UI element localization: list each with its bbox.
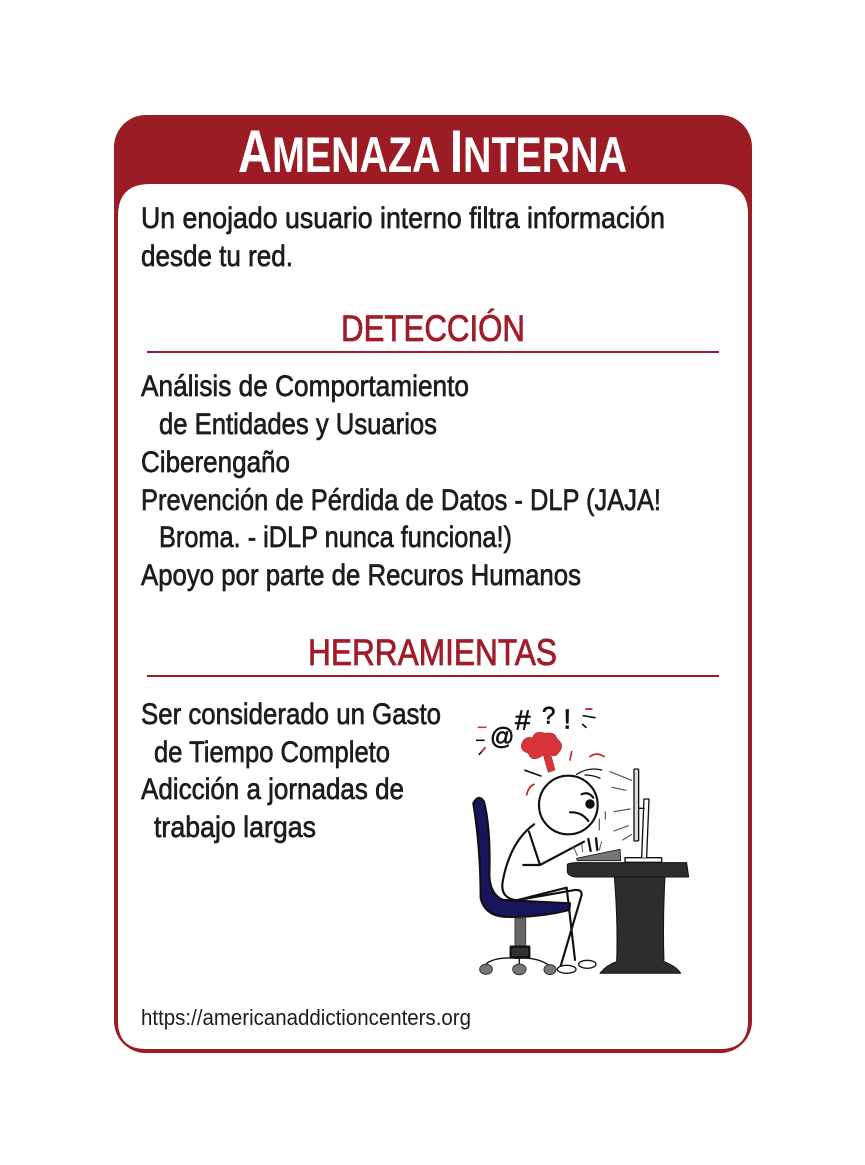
- heading: herramientas: HERRAMIENTAS: [308, 632, 557, 673]
- detection list: [141, 370, 661, 592]
- title: AMENAZA INTERNA: [238, 118, 627, 185]
- icon: anger marks: [477, 709, 604, 795]
- illustration: angry stick figure at a desk: [473, 702, 689, 975]
- detection list: de Entidades y Usuarios: [159, 408, 437, 441]
- icon: swearing symbols: !: [563, 703, 571, 734]
- intro text: desde tu red.: [141, 240, 293, 273]
- detection list: Broma. - iDLP nunca funciona!): [159, 521, 512, 554]
- icon: monitor: [625, 769, 662, 862]
- panel: card: [114, 115, 752, 1053]
- detection list: Prevención de Pérdida de Datos - DLP (JAJA!: [141, 484, 661, 517]
- tools list: [141, 698, 441, 844]
- icon: swearing symbols: [490, 702, 571, 750]
- icon: motion lines: [599, 772, 632, 840]
- icon: stick figure: [502, 769, 602, 973]
- intro text: [141, 202, 665, 273]
- tools list: de Tiempo Completo: [154, 736, 390, 769]
- icon: keyboard: [577, 849, 621, 861]
- detection list: Análisis de Comportamiento: [141, 370, 469, 403]
- tools list: Adicción a jornadas de: [141, 773, 404, 806]
- intro text: Un enojado usuario interno filtra información: [141, 202, 665, 235]
- icon: swearing symbols: ?: [542, 702, 555, 729]
- tools list: trabajo largas: [154, 811, 316, 844]
- detection list: Apoyo por parte de Recuros Humanos: [141, 559, 581, 592]
- heading: detección: DETECCIÓN: [341, 308, 525, 349]
- icon: anger cloud: [521, 732, 562, 772]
- icon: swearing symbols: #: [515, 704, 531, 735]
- icon: swearing symbols: @: [490, 723, 514, 750]
- tools list: Ser considerado un Gasto: [141, 698, 441, 731]
- icon: desk: [567, 863, 689, 973]
- detection list: Ciberengaño: [141, 446, 290, 479]
- source url: https://americanaddictioncenters.org: [141, 1005, 471, 1030]
- icon: office chair: [473, 798, 570, 975]
